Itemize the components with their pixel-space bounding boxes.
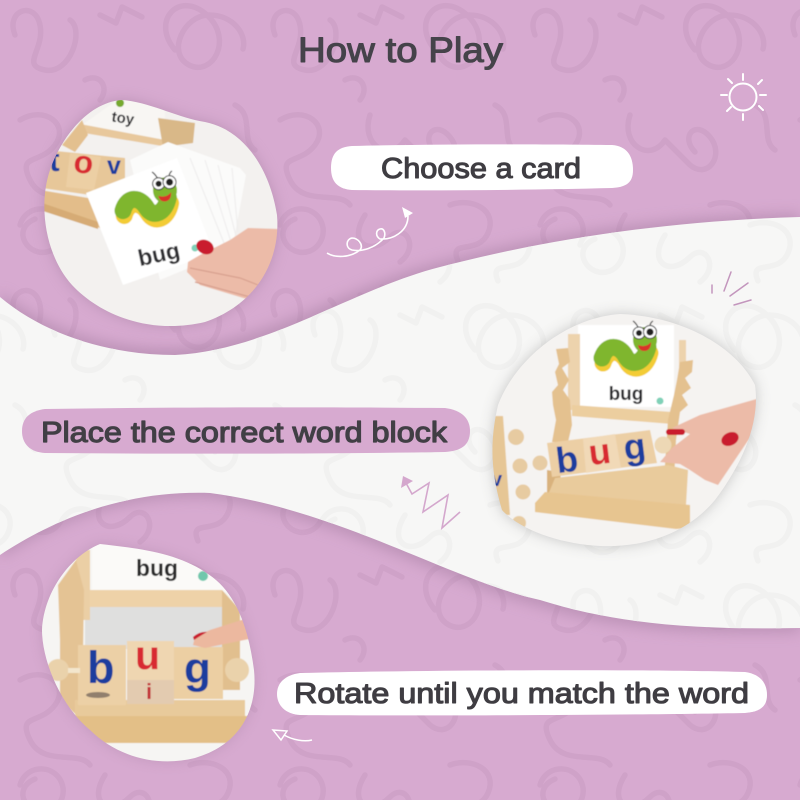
title: How to Play [298, 31, 504, 70]
photo 2: placing word block: v [491, 469, 503, 491]
photo 1: choosing a card: v [107, 152, 121, 180]
side block [492, 416, 510, 516]
pill: place the correct word block: Place the correct word block [41, 417, 448, 449]
photo 1: choosing a card: o [72, 143, 95, 181]
pill: choose a card [331, 144, 633, 190]
wood block letters: t [49, 142, 60, 178]
pill: choose a card: Choose a card [381, 153, 581, 185]
photo 3: rotating blocks: b [87, 642, 114, 693]
photo 2: placing word block: u [586, 430, 613, 473]
left notched pillar [552, 348, 572, 442]
photo 3: rotating blocks [40, 542, 256, 764]
photo 2: placing word block: g [621, 425, 648, 468]
rotating blocks [547, 430, 657, 477]
shadow of white wave band [0, 214, 800, 633]
right notched pillar [664, 360, 694, 468]
card stack [130, 142, 246, 280]
arrow: white left [273, 730, 312, 741]
card label bug: bug [609, 384, 643, 405]
white wave band [0, 217, 800, 628]
arrow: curly white [327, 207, 413, 256]
photo 1: choosing a card [41, 97, 281, 330]
hand [187, 228, 280, 303]
card label bug: bug [135, 237, 182, 271]
photo 3: rotating blocks: u [135, 632, 160, 678]
pill: rotate until you match the word: Rotate until you match the word [294, 678, 749, 710]
burst lines [712, 272, 751, 305]
photo 3: rotating blocks: g [184, 644, 211, 693]
card label toy: toy [111, 109, 136, 129]
pill: rotate until you match the word [277, 670, 767, 715]
photo 2: placing word block [485, 305, 765, 555]
rotating blocks [78, 645, 126, 705]
photo 3: rotating blocks: i [146, 679, 152, 704]
card label bug: bug [136, 555, 178, 581]
photo 2: placing word block: b [554, 438, 580, 481]
pill: place the correct word block [22, 407, 470, 454]
hand [660, 398, 762, 485]
icon: sun [721, 74, 766, 120]
finger [192, 619, 248, 648]
arrow: zigzag purple [401, 476, 460, 528]
